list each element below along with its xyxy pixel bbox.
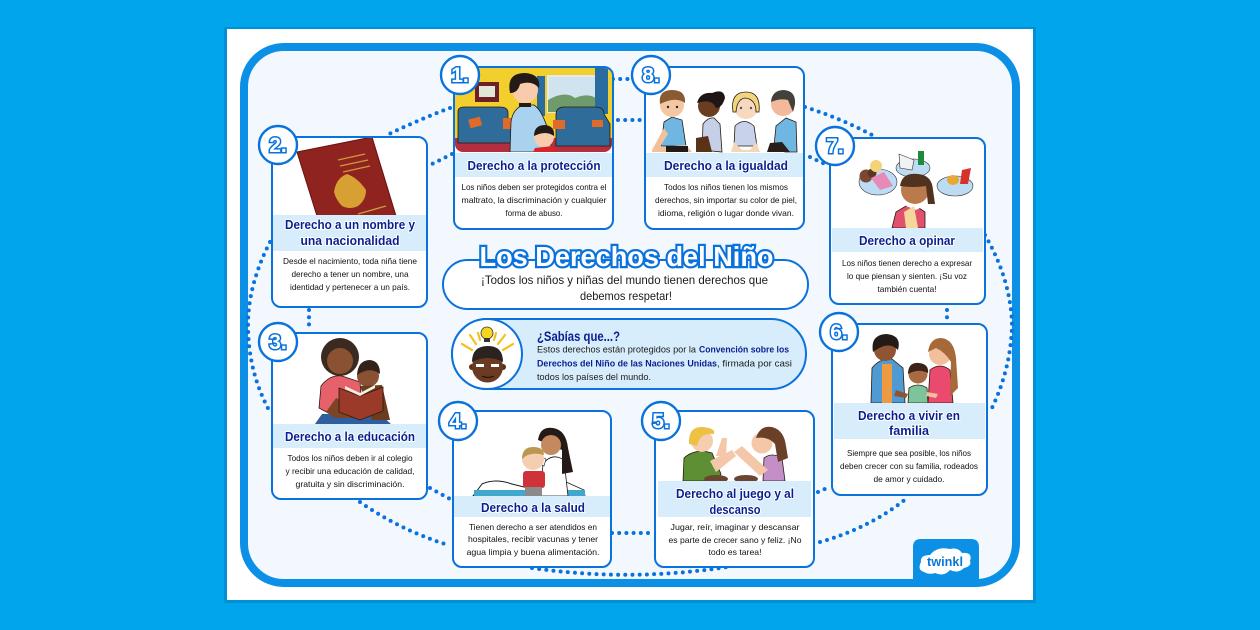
number 8: 8. xyxy=(642,64,660,87)
card 8: igualdad: Todos los niños tienen los mismos xyxy=(664,182,788,192)
number 2: 2. xyxy=(269,134,287,157)
page sheet xyxy=(224,27,1036,603)
number 3 xyxy=(259,323,297,361)
card 1: protección: Derecho a la protección xyxy=(468,158,601,173)
card 5: juego y descanso xyxy=(642,402,814,567)
card 2: nombre y nacionalidad: Derecho a un nombre y xyxy=(285,217,416,232)
card 1: protección xyxy=(441,56,613,229)
card 6: familia: de amor y cuidado. xyxy=(874,474,944,484)
did you know panel xyxy=(452,319,806,389)
illustration: family holding hands xyxy=(871,334,958,403)
title: Los Derechos del Niño xyxy=(480,241,774,272)
number 6: 6. xyxy=(830,321,848,344)
card 5: juego y descanso: es parte de crecer sano y feliz. ¡No xyxy=(668,535,802,545)
card 7: opinar: lo que piensan y sienten. ¡Su voz xyxy=(847,271,967,281)
twinkl logo tab: twinkl xyxy=(927,554,963,569)
card 8: igualdad: Derecho a la igualdad xyxy=(664,158,788,173)
card 5: juego y descanso: descanso xyxy=(710,502,761,517)
card 2: nombre y nacionalidad: Desde el nacimiento, toda niña tiene xyxy=(283,256,417,266)
card 2: nombre y nacionalidad: una nacionalidad xyxy=(300,233,400,248)
card 4: salud xyxy=(439,402,611,567)
illustration: man reading a book with child xyxy=(315,338,391,424)
illustration: passport xyxy=(297,137,396,216)
card 5: juego y descanso: Derecho al juego y al xyxy=(676,486,794,501)
card 5: juego y descanso: Jugar, reír, imaginar y descansar xyxy=(670,522,800,532)
did you know panel: , firmada por casi xyxy=(717,358,792,370)
number 8 xyxy=(632,56,670,94)
card 1: protección: maltrato, la discriminación y cualquier xyxy=(462,195,607,205)
illustration: girl with speech bubbles xyxy=(859,151,973,228)
number 4 xyxy=(439,402,477,440)
subtitle pill: ¡Todos los niños y niñas del mundo tienen derechos que xyxy=(481,273,768,287)
did you know panel: Derechos del Niño de las Naciones Unidas xyxy=(537,358,717,370)
subtitle pill xyxy=(443,260,808,309)
card 3: educación xyxy=(259,323,427,499)
illustration: two children playing clapping game xyxy=(683,427,788,483)
icon: child with lightbulb xyxy=(452,319,522,389)
card 2: nombre y nacionalidad: derecho a tener un nombre, una xyxy=(292,269,409,279)
card 3: educación: Todos los niños deben ir al colegio xyxy=(288,453,413,463)
number 1 xyxy=(441,56,479,94)
card 8: igualdad xyxy=(632,56,804,229)
did you know panel: Convención sobre los xyxy=(699,344,789,356)
twinkl logo tab xyxy=(913,539,979,583)
did you know panel: todos los países del mundo. xyxy=(537,372,651,383)
dotted connectors xyxy=(248,79,1012,575)
number 5 xyxy=(642,402,680,440)
card 6: familia: Siempre que sea posible, los niños xyxy=(847,448,971,458)
number 5: 5. xyxy=(652,410,670,433)
number 6 xyxy=(820,313,858,351)
card 3: educación: gratuita y sin discriminación. xyxy=(296,479,404,489)
number 2 xyxy=(259,126,297,164)
did you know panel: ¿Sabías que...? xyxy=(537,329,620,344)
card 8: igualdad: idioma, religión o lugar donde vivan. xyxy=(658,208,794,218)
number 4: 4. xyxy=(449,410,467,433)
card 2: nombre y nacionalidad xyxy=(259,126,427,307)
card 5: juego y descanso: todo es tarea! xyxy=(708,547,762,557)
card 3: educación: Derecho a la educación xyxy=(285,429,415,444)
card 2: nombre y nacionalidad: identidad y pertenecer a un país. xyxy=(290,282,410,292)
did you know panel: Estos derechos están protegidos por la xyxy=(537,344,697,356)
card 3: educación: y recibir una educación de calidad, xyxy=(286,466,414,476)
illustration: four seated children xyxy=(652,90,797,152)
number 3: 3. xyxy=(269,331,287,354)
card 4: salud: Derecho a la salud xyxy=(481,500,585,515)
card 6: familia: deben crecer con su familia, rodeados xyxy=(840,461,978,471)
card 7: opinar: también cuenta! xyxy=(878,284,936,294)
card 7: opinar xyxy=(816,127,985,304)
number 7 xyxy=(816,127,854,165)
card 4: salud: agua limpia y buena alimentación. xyxy=(466,547,600,557)
card 1: protección: forma de abuso. xyxy=(506,208,562,218)
subtitle pill: debemos respetar! xyxy=(580,289,672,303)
rounded frame panel xyxy=(244,47,1016,583)
card 4: salud: hospitales, recibir vacunas y tener xyxy=(468,534,598,544)
number 1: 1. xyxy=(451,64,469,87)
card 6: familia xyxy=(820,313,987,495)
card 8: igualdad: derechos, sin importar su color de piel, xyxy=(655,195,797,205)
number 7: 7. xyxy=(826,135,844,158)
card 7: opinar: Los niños tienen derecho a expresar xyxy=(842,258,972,268)
card 6: familia: Derecho a vivir en xyxy=(858,408,960,423)
card 6: familia: familia xyxy=(889,423,930,438)
card 7: opinar: Derecho a opinar xyxy=(859,233,955,248)
card 1: protección: Los niños deben ser protegidos contra el xyxy=(462,182,607,192)
illustration: mother and child in living room xyxy=(455,68,612,152)
illustration: doctor and child xyxy=(473,428,585,496)
card 4: salud: Tienen derecho a ser atendidos en xyxy=(469,522,597,532)
